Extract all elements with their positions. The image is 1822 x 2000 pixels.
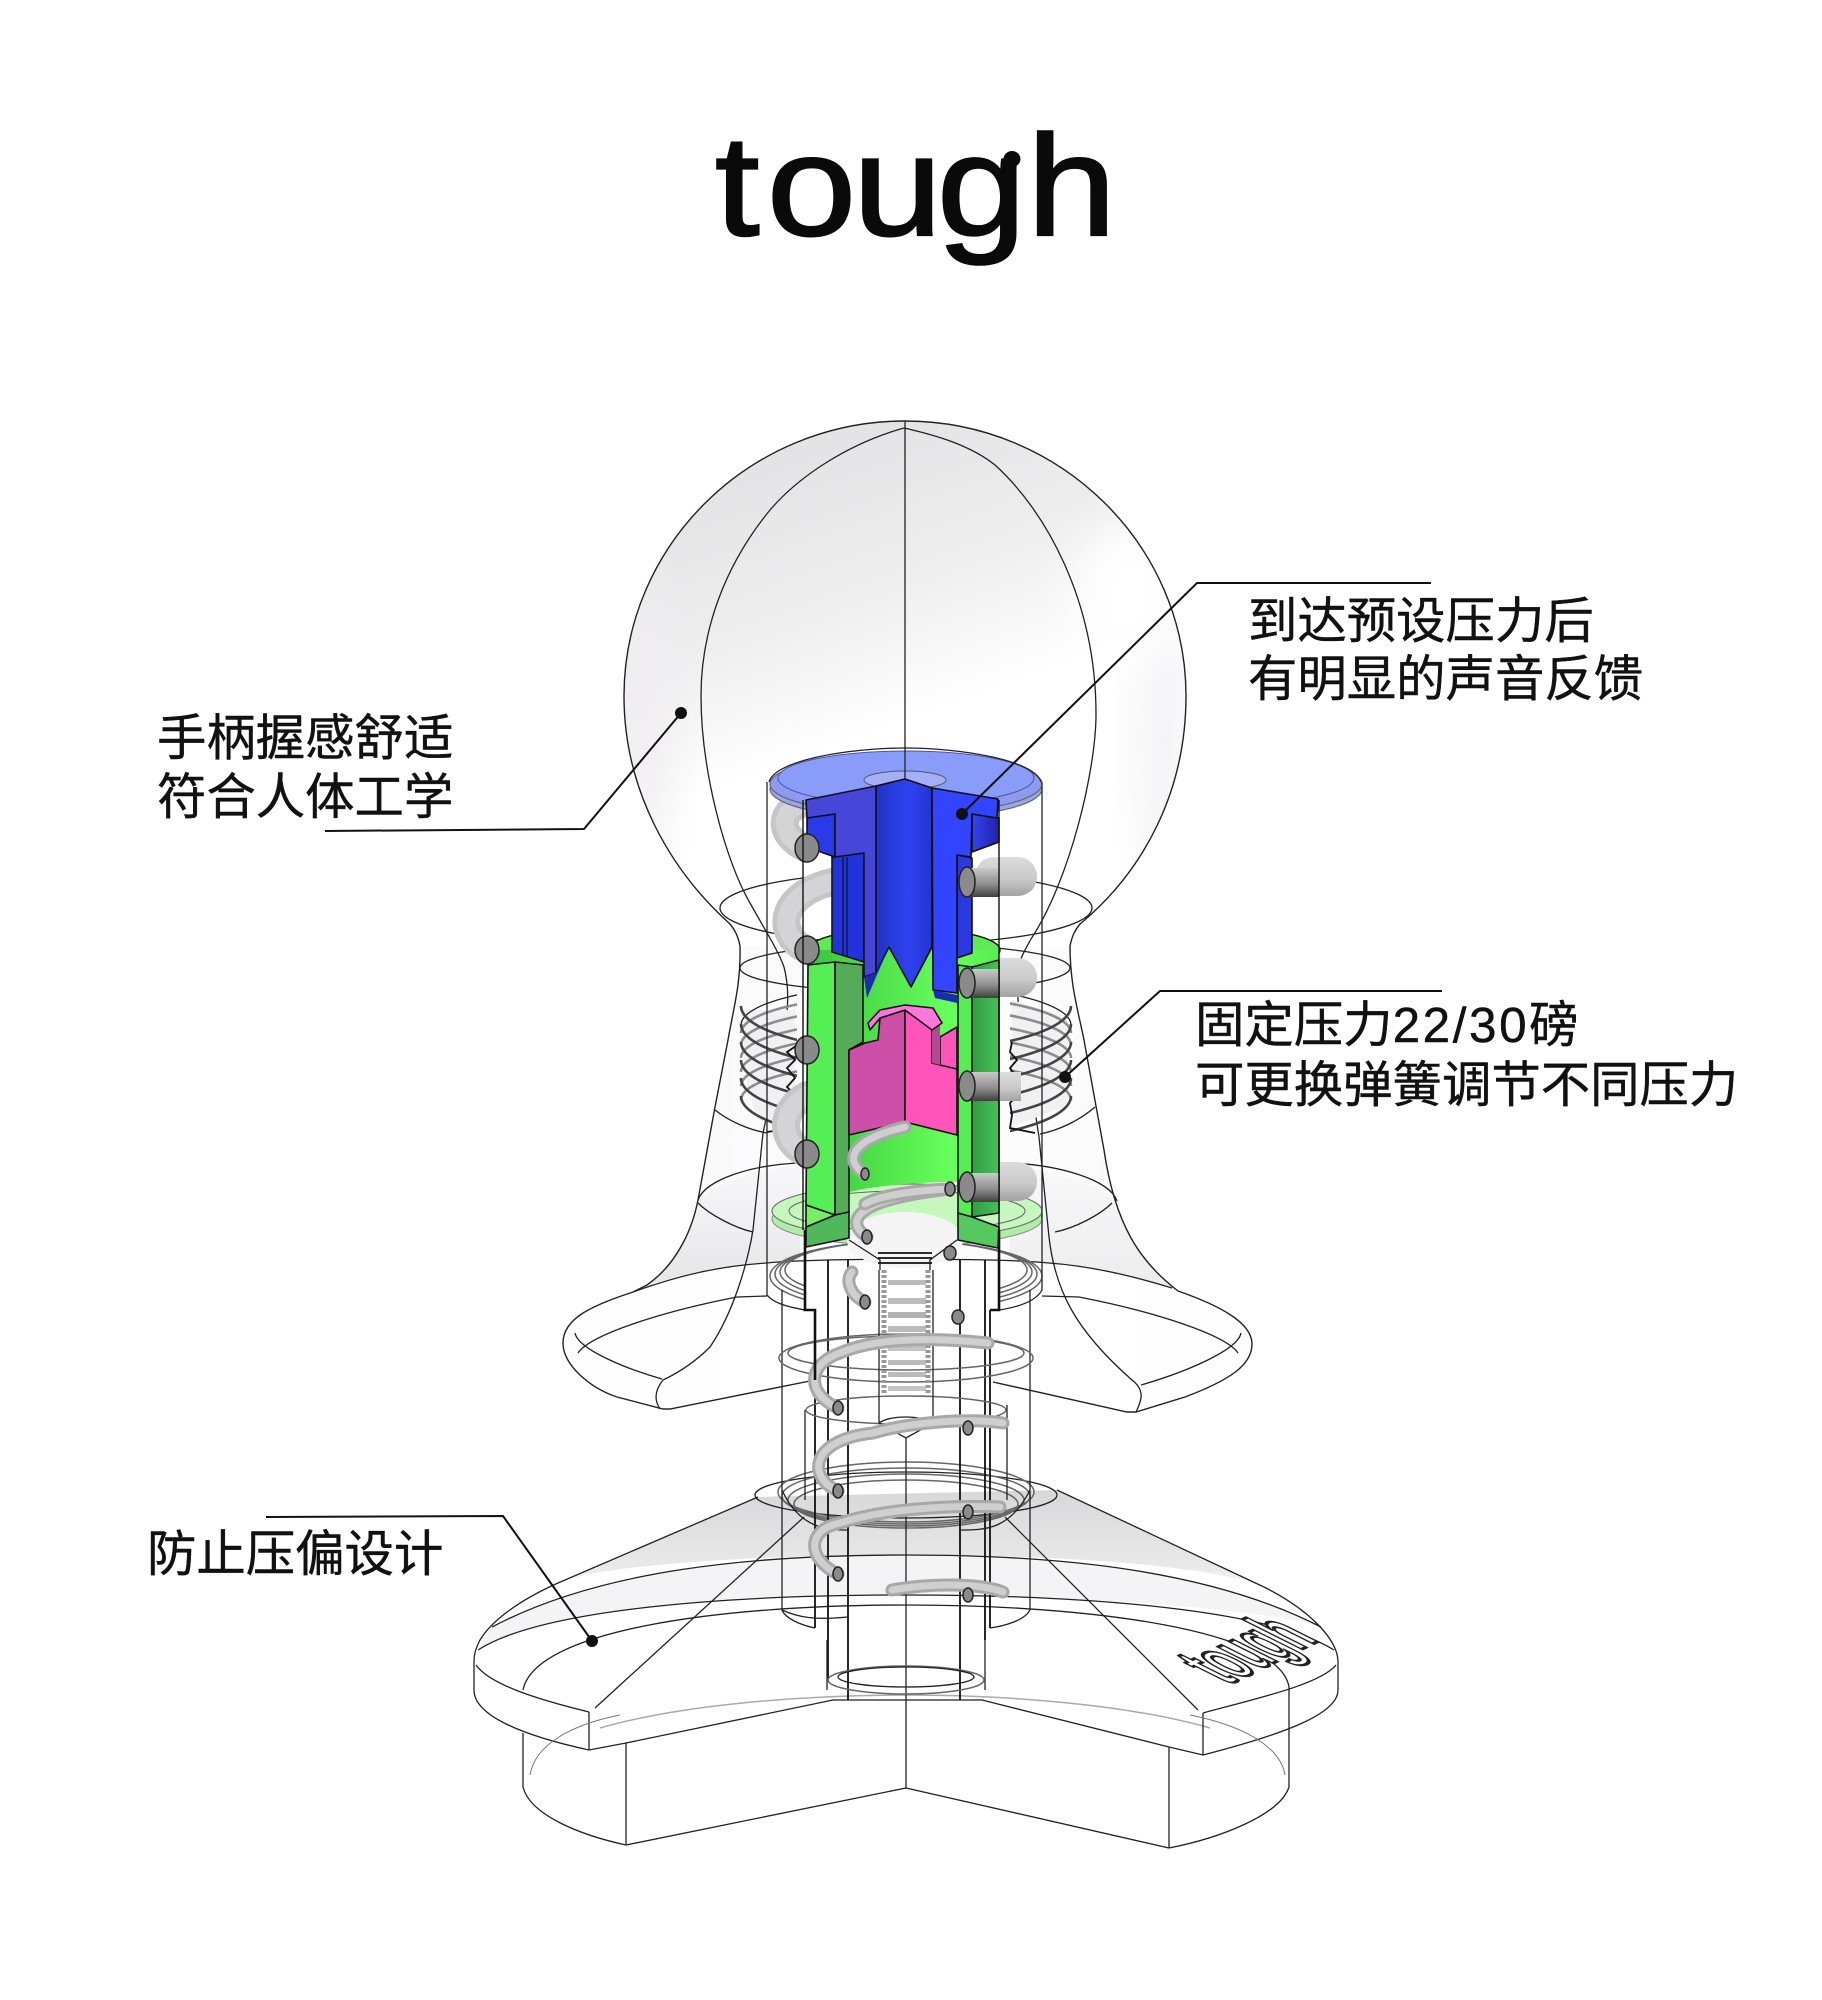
handle thread background right — [1012, 1000, 1068, 1127]
small spring over core — [854, 1127, 955, 1204]
plunger left stem — [832, 853, 864, 962]
text: handle comfort: 符合人体工学 — [157, 770, 453, 825]
plunger bottom strips — [933, 990, 957, 1003]
product illustration: transparent tamper — [474, 421, 1338, 1848]
handle thread background left — [742, 1010, 795, 1125]
base engraved logo: tough — [1154, 1604, 1337, 1694]
leader dot: click — [956, 808, 968, 820]
holder left wall section — [835, 962, 863, 1215]
flare shading right — [1010, 1165, 1172, 1288]
neck and waist ellipses — [698, 872, 1117, 1232]
leader dot: pressure — [1059, 1071, 1071, 1083]
pink top rim — [868, 1005, 942, 1030]
flange seams — [633, 1259, 1172, 1292]
handle outline with sphere — [563, 421, 1252, 1412]
holder left wall face — [806, 962, 835, 1215]
leader line: anti tilt — [266, 1516, 592, 1641]
sphere meridian seams — [656, 428, 904, 1409]
text: fixed pressure: 固定压力22/30磅 — [1195, 998, 1579, 1053]
small spring coils — [857, 1189, 950, 1237]
holder back wall — [808, 950, 999, 1192]
text: fixed pressure: 可更换弹簧调节不同压力 — [1195, 1058, 1738, 1113]
central screw — [879, 1270, 933, 1438]
base: three-lobed foot — [474, 1490, 1338, 1848]
pink side shade — [932, 1022, 940, 1065]
plunger right lip — [972, 814, 999, 852]
thread zigzag profile — [767, 1042, 1035, 1133]
leader dot: handle — [675, 707, 687, 719]
base fold lines — [595, 1517, 1198, 1710]
right big spring back coils — [975, 857, 1037, 1201]
leader dot: anti tilt — [586, 1635, 598, 1647]
big spring cut ends — [795, 834, 1021, 1202]
lower shaft wires — [779, 1260, 1033, 1788]
collar threads — [755, 1462, 1057, 1528]
callout: handle comfort — [157, 707, 687, 831]
base lower block — [523, 1687, 1289, 1848]
blue disc — [770, 751, 1042, 819]
ring white centre — [847, 1212, 963, 1268]
flare shading left — [647, 1165, 800, 1285]
text: anti tilt: 防止压偏设计 — [147, 1527, 443, 1582]
base rim rings — [492, 1555, 1321, 1627]
inner threaded ring — [769, 1244, 1043, 1302]
text: handle comfort: 手柄握感舒适 — [157, 711, 453, 766]
base cone shading — [558, 1490, 1264, 1587]
handle thread coils — [740, 994, 1072, 1132]
handle body — [563, 421, 1252, 1412]
callout: anti tilt — [147, 1516, 598, 1647]
text: click feedback: 到达预设压力后 — [1248, 594, 1594, 649]
green ring — [772, 1184, 1042, 1246]
housing cylinder lines — [767, 421, 1042, 1380]
sphere shading — [624, 422, 1182, 826]
pink left face — [849, 1010, 905, 1135]
plunger right stem — [957, 855, 972, 958]
base silhouette — [474, 1490, 1338, 1755]
text: click feedback: 有明显的声音反馈 — [1248, 652, 1643, 707]
spring end caps — [833, 1230, 973, 1602]
holder right foot — [958, 1213, 999, 1248]
plunger centre — [876, 779, 932, 987]
holder right wall section — [972, 960, 999, 1217]
left big spring coils — [785, 803, 832, 1154]
plunger tooth shade — [864, 947, 889, 998]
handle silhouette fill — [563, 946, 1252, 1412]
lower spring — [815, 1189, 1003, 1602]
plunger left section — [806, 786, 876, 977]
plunger left lip — [807, 814, 835, 857]
holder left foot — [806, 1212, 849, 1247]
logo: tough wordmark: tough — [715, 107, 1116, 266]
green spring holder — [806, 928, 1000, 1248]
callout: click feedback — [956, 583, 1643, 820]
callout: fixed pressure — [1059, 991, 1738, 1113]
blue plunger — [806, 779, 999, 1003]
flange interior whitening — [563, 1263, 1252, 1412]
leader line: handle — [325, 713, 681, 831]
plunger right section — [932, 788, 998, 993]
base rim shading — [478, 1555, 1321, 1650]
leader line: pressure — [1065, 991, 1442, 1077]
pink side step — [940, 1027, 957, 1069]
holder right wall face — [958, 965, 972, 1217]
holder left chamfer — [806, 1205, 835, 1227]
holder top ring — [808, 928, 1000, 972]
leader line: click — [962, 583, 1431, 814]
pink core — [849, 1005, 957, 1135]
pink right face — [905, 1010, 957, 1135]
